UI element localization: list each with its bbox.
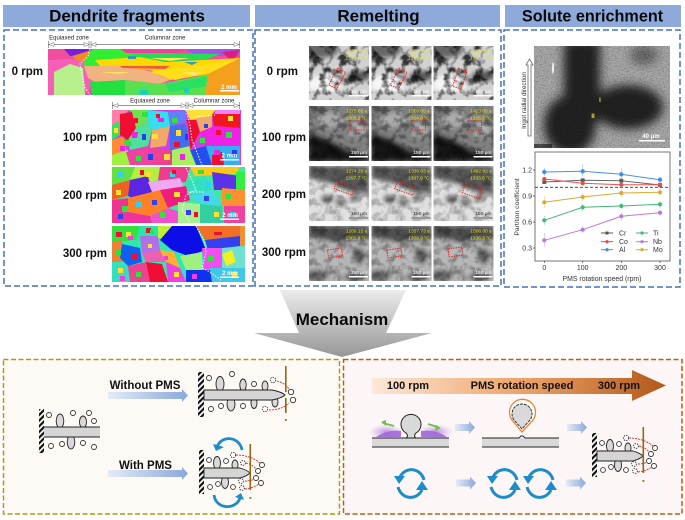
arrow: step 1 top	[455, 421, 475, 434]
panel: PMS effect on dendrites	[4, 360, 340, 514]
legend: Al	[619, 247, 626, 254]
series: Mo	[543, 189, 662, 208]
panel: solute enrichment	[504, 30, 680, 287]
label: 200 rpm left: 200 rpm	[63, 190, 107, 202]
heading: Remelting: Remelting	[337, 6, 420, 26]
chart: partition coefficient: 0.6	[522, 220, 532, 226]
micrograph: solute map: I	[599, 98, 601, 104]
zone brackets 0 rpm: Equiaxed zone	[49, 36, 90, 42]
micrograph row 200: 150 μm	[351, 211, 367, 217]
chart: partition coefficient: 200	[615, 265, 627, 272]
legend: Nb	[653, 239, 662, 246]
icon: dendrite without PMS	[198, 366, 296, 421]
zone brackets 100 rpm: Equiaxed zone	[130, 98, 171, 104]
micrograph row 0: 1302.1 °C	[470, 56, 492, 62]
micrograph row 300: 1301.9 °C	[346, 236, 368, 242]
EBSD map 300 rpm	[112, 226, 245, 282]
label: 200 rpm middle: 200 rpm	[262, 189, 306, 201]
zone brackets 0 rpm: Columnar zone	[145, 36, 186, 42]
series: Co	[543, 177, 662, 186]
micrograph row 300: 1269.15 s	[346, 228, 368, 234]
micrograph row 100: 1326.5 °C	[470, 116, 492, 122]
arrow: mechanism	[254, 290, 432, 357]
arrow: step 2 bottom	[566, 476, 586, 490]
arrow: PMS rotation speed	[372, 370, 666, 401]
label: 300 rpm left: 300 rpm	[63, 248, 107, 260]
micrograph: solute map: 40 μm	[642, 134, 660, 140]
micrograph row 200: 1307.9 °C	[408, 176, 430, 182]
panel: dendrite fragments	[4, 30, 253, 286]
icon: initial dendrite	[39, 409, 100, 453]
chart: partition coefficient: 300	[654, 265, 666, 272]
panel: rotation speed effect	[344, 360, 682, 514]
micrograph row 100: 150 μm	[413, 150, 430, 156]
micrograph row 0: 1285.6 °C	[346, 56, 368, 62]
micrograph: solute map: II	[591, 114, 595, 120]
icon: solute pile-up at dendrite neck	[368, 414, 454, 447]
micrograph row 0: 1176.10 s	[346, 48, 368, 54]
label: 0 rpm left: 0 rpm	[12, 66, 43, 78]
chart: partition coefficient: 0.9	[522, 194, 532, 200]
micrograph row 200: 150 μm	[413, 211, 430, 217]
micrograph row 300: 1506.00 s	[470, 228, 492, 234]
zone brackets 0 rpm	[48, 36, 240, 48]
micrograph row 300	[305, 226, 494, 281]
arrow: step 2 top	[567, 421, 587, 434]
micrograph row 300: 150 μm	[413, 270, 430, 276]
arrow: PMS rotation speed: 300 rpm	[598, 380, 640, 392]
micrograph row 0	[299, 42, 496, 101]
micrograph row 200	[309, 166, 494, 221]
chart: partition coefficient: 1.2	[522, 168, 532, 174]
icon: circulation right	[523, 470, 557, 497]
micrograph row 0: 1289.35 s	[470, 48, 492, 54]
micrograph row 100: 1423.05 s	[470, 108, 492, 114]
micrograph: solute map	[534, 46, 670, 148]
icon: single circulation	[394, 470, 428, 497]
micrograph row 100: 1304.8 °C	[408, 116, 430, 122]
micrograph row 300: 1337.73 s	[408, 228, 430, 234]
legend: Cr	[619, 230, 627, 238]
chart: partition coefficient: 100	[577, 265, 589, 272]
micrograph row 100	[309, 106, 494, 161]
series: Al	[543, 164, 662, 182]
micrograph row 300: 150 μm	[351, 270, 367, 276]
heading: Dendrite fragments	[3, 5, 250, 27]
arrow: with PMS	[108, 467, 188, 480]
legend	[601, 230, 663, 254]
arrow: mechanism: Mechanism	[296, 310, 388, 329]
micrograph row 0: 1295.0 °C	[408, 56, 430, 62]
chart: partition coefficient: 0.3	[522, 246, 532, 252]
micrograph row 0: 150 μm	[475, 89, 492, 95]
micrograph row 100: 1309.65 s	[408, 108, 430, 114]
heading: Dendrite fragments: Dendrite fragments	[49, 6, 205, 26]
scale bar 100 rpm: 2 mm	[222, 154, 237, 160]
legend: Co	[619, 239, 628, 246]
icon: detached fragment	[482, 399, 559, 447]
legend: Ti	[653, 230, 659, 238]
heading: Solute enrichment: Solute enrichment	[522, 8, 664, 26]
label: without PMS: Without PMS	[110, 380, 181, 392]
heading: Remelting	[255, 5, 500, 27]
legend: Mo	[653, 247, 663, 254]
chart: partition coefficient: PMS rotation speed (rpm)	[563, 276, 641, 283]
micrograph row 200: 1333.5 °C	[470, 176, 492, 182]
micrograph row 100: 1275.85 s	[346, 108, 368, 114]
micrograph row 300: 150 μm	[475, 270, 492, 276]
micrograph row 300: 1309.3 °C	[408, 236, 430, 242]
scale bar 0 rpm: 2 mm	[221, 85, 237, 91]
label: with PMS: With PMS	[119, 460, 172, 472]
icon: dendrite with PMS	[199, 444, 264, 499]
series: Nb	[543, 210, 662, 247]
EBSD map 100 rpm	[112, 110, 241, 165]
micrograph row 300: 1338.3 °C	[470, 236, 492, 242]
label: ingot radial direction: Ingot radial direction	[521, 72, 528, 129]
micrograph row 200: 1297.7 °C	[346, 176, 368, 182]
arrow: upper flow	[213, 439, 242, 451]
micrograph row 100: 150 μm	[351, 150, 367, 156]
label: 100 rpm middle: 100 rpm	[262, 132, 306, 144]
label: 100 rpm left: 100 rpm	[63, 132, 107, 144]
arrow: lower flow	[214, 493, 244, 507]
heading: Solute enrichment	[505, 5, 681, 27]
label: 300 rpm middle: 300 rpm	[262, 247, 306, 259]
zone brackets 100 rpm	[112, 98, 240, 109]
zone brackets 100 rpm: Columnar zone	[194, 98, 235, 104]
series: Cr	[543, 179, 662, 186]
scale bar 300 rpm: 2 mm	[222, 271, 238, 277]
panel: remelting	[255, 30, 501, 286]
arrow: PMS rotation speed: 100 rpm	[387, 380, 429, 392]
micrograph row 100: 150 μm	[475, 150, 492, 156]
micrograph row 200: 1274.20 s	[346, 168, 368, 174]
arrow: step 1 bottom	[456, 476, 476, 490]
arrow: PMS rotation speed: PMS rotation speed	[471, 380, 573, 392]
micrograph row 200: 150 μm	[475, 211, 492, 217]
chart: partition coefficient	[514, 152, 670, 283]
icon: dendrite at high speed	[592, 427, 658, 482]
micrograph row 0: 1237.89 s	[408, 48, 430, 54]
chart: partition coefficient: 0	[542, 265, 546, 272]
micrograph row 0: 150 μm	[351, 89, 367, 95]
micrograph row 200: 1482.92 s	[470, 168, 492, 174]
scale bar 200 rpm: 2 mm	[222, 213, 238, 219]
series: Ti	[543, 201, 662, 225]
icon: circulation left	[487, 470, 521, 497]
chart: partition coefficient: Partition coefficient	[514, 178, 521, 236]
micrograph row 200: 1336.83 s	[408, 168, 430, 174]
EBSD map 0 rpm	[48, 49, 240, 95]
EBSD map 200 rpm	[112, 167, 245, 223]
arrow: radial direction	[526, 59, 533, 136]
micrograph row 0: 150 μm	[413, 89, 430, 95]
arrow: without PMS	[108, 389, 188, 402]
micrograph row 100: 1300.2 °C	[346, 116, 368, 122]
label: 0 rpm middle: 0 rpm	[267, 66, 298, 78]
